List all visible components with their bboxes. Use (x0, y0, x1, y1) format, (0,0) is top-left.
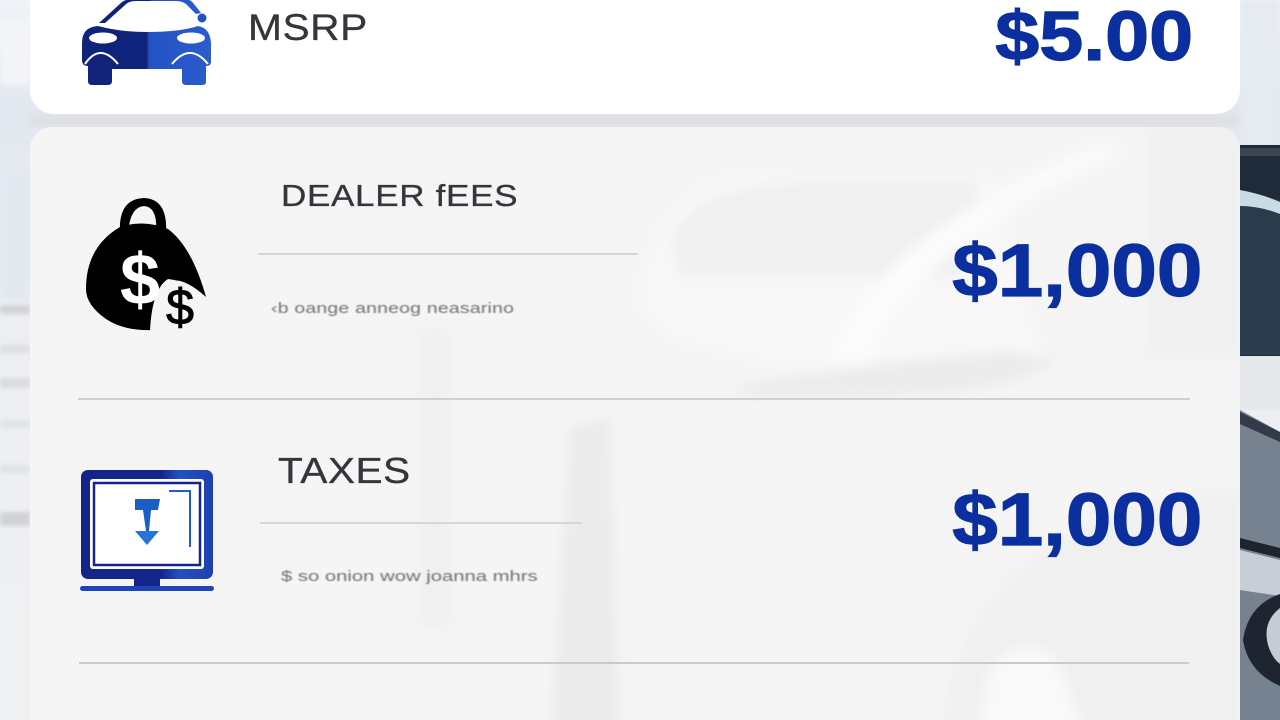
ghost car shapes behind the card (558, 360, 1032, 720)
label: taxes: TAXES (278, 450, 411, 491)
label: MSRP: MSRP (248, 7, 368, 48)
caption: dealer fees: ‹b oange anneog neasarino (271, 300, 514, 317)
icon: tax monitor (80, 470, 214, 591)
panel: fees and taxes card (30, 127, 1240, 720)
label: dealer fees: DEALER fEES (281, 178, 518, 213)
panel: MSRP card (30, 0, 1240, 114)
icon: car (82, 0, 211, 85)
icon: money bag: $ (120, 240, 160, 320)
divider: dealer fees (258, 253, 638, 255)
divider: taxes (260, 522, 582, 524)
value: dealer fees amount: $1,000 (952, 229, 1202, 312)
icon: money bag (86, 198, 206, 333)
caption: taxes: $ so onion wow joanna mhrs (281, 568, 538, 585)
divider: row separator (78, 398, 1190, 400)
value: taxes amount: $1,000 (952, 478, 1202, 561)
divider: bottom separator (79, 662, 1189, 664)
